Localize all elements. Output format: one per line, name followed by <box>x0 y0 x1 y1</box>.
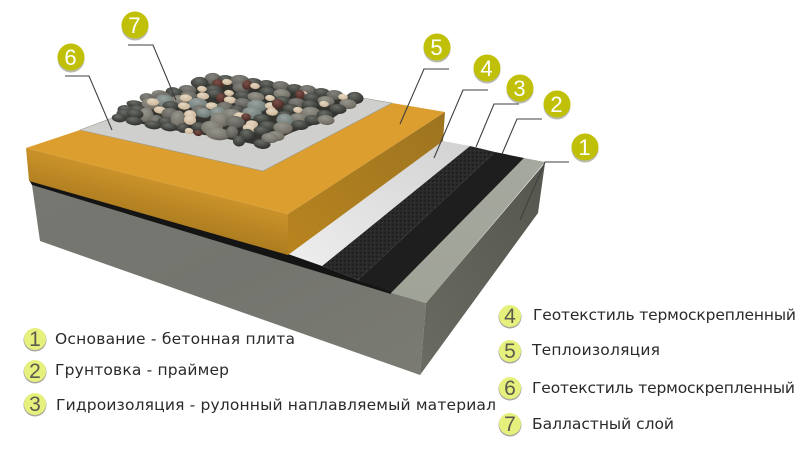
ballast stones <box>111 72 364 150</box>
callout 1: 1 <box>578 135 591 160</box>
upper geotextile <box>80 90 392 171</box>
legend item 2: Грунтовка - праймер <box>55 361 229 379</box>
lower geotextile <box>288 141 470 266</box>
legend item 4: 4 <box>504 305 516 328</box>
callout 6: 6 <box>64 45 77 70</box>
callout 6 <box>58 44 112 130</box>
primer layer <box>358 152 524 293</box>
callout 1 <box>520 134 598 220</box>
callout 5 <box>400 34 450 124</box>
callout 3: 3 <box>513 76 526 101</box>
waterproofing roll layer <box>322 146 495 280</box>
legend item 3: Гидроизоляция - рулонный наплавляемый материал <box>56 396 496 414</box>
legend item 6 <box>498 377 795 400</box>
legend item 6: 6 <box>504 377 516 400</box>
legend item 5: 5 <box>504 340 516 363</box>
callout 3 <box>476 74 534 147</box>
legend item 7 <box>498 413 674 436</box>
legend item 2 <box>24 360 229 384</box>
legend item 7: 7 <box>504 413 516 436</box>
callout 7: 7 <box>128 13 141 38</box>
legend item 1: 1 <box>29 328 41 351</box>
concrete base slab <box>32 158 545 375</box>
legend item 4 <box>498 305 796 328</box>
legend item 4: Геотекстиль термоскрепленный <box>533 306 796 324</box>
legend item 7: Балластный слой <box>532 415 674 433</box>
legend item 1: Основание - бетонная плита <box>55 330 295 348</box>
legend left <box>24 328 496 416</box>
legend item 1 <box>24 328 295 352</box>
thermal insulation <box>26 103 445 255</box>
callout 4 <box>434 54 500 158</box>
black membrane edge <box>29 180 391 294</box>
callout 2: 2 <box>550 92 563 117</box>
legend right <box>498 305 796 436</box>
callout 4: 4 <box>480 56 493 81</box>
legend item 6: Геотекстиль термоскрепленный <box>532 379 795 397</box>
callout 2 <box>502 90 570 154</box>
legend item 5: Теплоизоляция <box>531 341 660 359</box>
legend item 3: 3 <box>29 393 41 416</box>
callout 7 <box>122 12 176 100</box>
legend item 5 <box>498 340 660 364</box>
legend item 2: 2 <box>29 360 41 383</box>
roof layer cross-section <box>26 72 545 375</box>
callout 5: 5 <box>430 35 443 60</box>
